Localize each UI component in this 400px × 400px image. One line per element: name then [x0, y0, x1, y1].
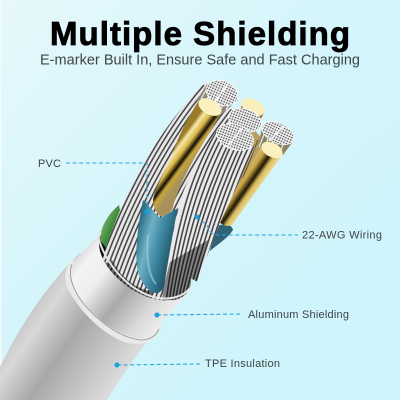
rear strand ends — [228, 108, 262, 132]
callout: Aluminum Shielding — [154, 309, 349, 321]
callout: TPE Insulation — [114, 358, 280, 370]
rear gold conductor — [240, 98, 264, 120]
callout: PVC — [38, 158, 150, 214]
tube opening — [85, 208, 205, 316]
aluminum shielding tube — [72, 222, 190, 338]
callout: PVC: PVC — [38, 158, 61, 170]
left wire strands — [103, 82, 232, 301]
blue core — [136, 200, 178, 293]
strand bundle D top — [258, 128, 294, 155]
opening rim — [98, 236, 190, 299]
tan rear wire — [233, 131, 262, 194]
callout: 22-AWG Wiring: 22-AWG Wiring — [302, 230, 382, 242]
blue stub behind right strands — [210, 224, 233, 251]
collar ring — [65, 260, 162, 344]
green wire — [100, 205, 120, 248]
strand end C — [216, 123, 254, 151]
callout: TPE Insulation: TPE Insulation — [205, 358, 280, 370]
title: Multiple Shielding — [50, 15, 350, 52]
gold conductor A — [153, 100, 222, 216]
cable illustration — [0, 70, 298, 400]
strand end A — [197, 84, 238, 114]
callout: Aluminum Shielding: Aluminum Shielding — [248, 309, 349, 321]
TPE insulation outer jacket — [0, 253, 161, 400]
gold end A — [198, 98, 222, 116]
callout: 22-AWG Wiring — [194, 214, 382, 242]
gold conductor D — [218, 138, 285, 226]
right wire strands — [162, 130, 255, 300]
rim shadow on strands — [108, 262, 152, 296]
internal wires — [100, 80, 294, 301]
subtitle: E-marker Built In, Ensure Safe and Fast Charging — [40, 52, 360, 68]
